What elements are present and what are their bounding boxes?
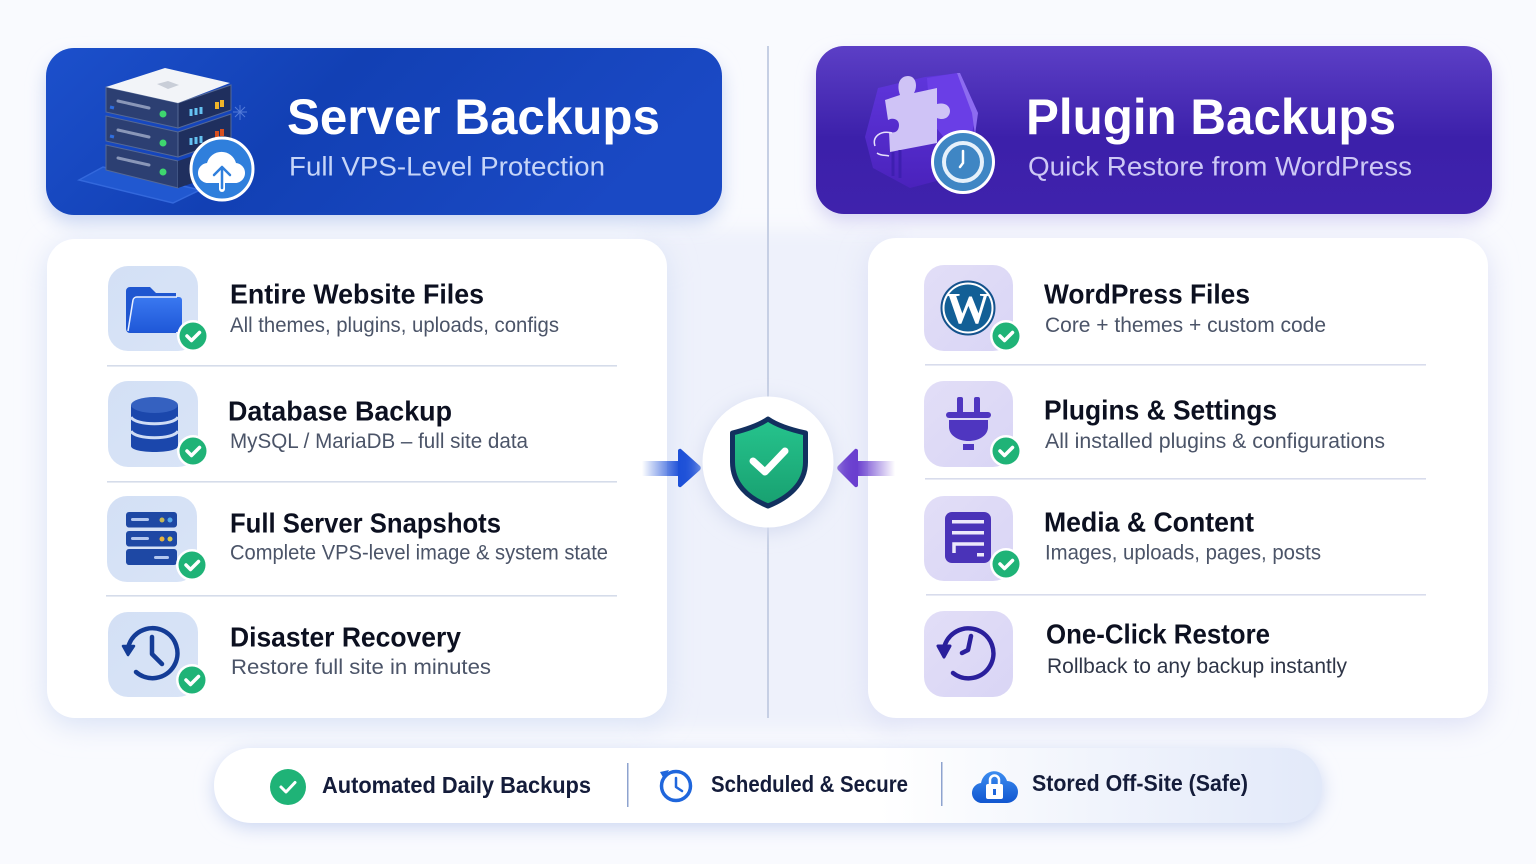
item: media and content: Media & Content — [1044, 506, 1254, 538]
item: one-click restore: One-Click Restore — [1046, 618, 1270, 650]
subheading: Quick Restore from WordPress — [1028, 152, 1412, 182]
header: server backups — [46, 48, 722, 223]
item: entire website files — [108, 266, 559, 352]
item: entire website files: All themes, plugins, uploads, configs — [230, 314, 559, 337]
item: full server snapshots — [107, 496, 608, 582]
icon: history clock — [123, 628, 177, 678]
feature: automated daily backups — [270, 769, 591, 805]
feature: automated daily backups: Automated Daily Backups — [322, 772, 591, 798]
header: plugin backups — [816, 46, 1492, 221]
icon: puzzle piece with clock — [865, 73, 995, 194]
feature: stored off-site: Stored Off-Site (Safe) — [1032, 770, 1248, 796]
subheading: Full VPS-Level Protection — [289, 152, 605, 182]
item: wordpress files — [924, 265, 1326, 352]
item: wordpress files: Core + themes + custom code — [1045, 314, 1326, 337]
icon: database — [131, 397, 178, 452]
icon: folder — [126, 287, 182, 333]
item: plugins and settings: All installed plugins & configurations — [1045, 430, 1385, 453]
panel: plugin backup list — [868, 238, 1488, 725]
feature: scheduled and secure: Scheduled & Secure — [711, 771, 908, 797]
item: disaster recovery: Disaster Recovery — [230, 622, 461, 652]
center shield badge — [702, 396, 834, 532]
item: disaster recovery — [108, 612, 491, 697]
heading: Server Backups — [287, 89, 660, 145]
icon: shield with check — [732, 419, 806, 506]
feature: scheduled and secure — [660, 770, 908, 800]
item: database backup: Database Backup — [228, 396, 452, 426]
icon: restore clock — [938, 628, 993, 678]
item: plugins and settings — [924, 381, 1385, 467]
item: database backup: MySQL / MariaDB – full site data — [230, 430, 528, 453]
arrow: server to shield — [642, 449, 701, 487]
panel: server backup list — [47, 239, 667, 725]
item: disaster recovery: Restore full site in minutes — [231, 656, 491, 679]
center divider line — [767, 46, 769, 718]
icon: wordpress logo: W — [946, 284, 990, 333]
item: one-click restore: Rollback to any backup instantly — [1047, 655, 1347, 678]
item: plugins and settings: Plugins & Settings — [1044, 394, 1277, 426]
arrow: plugin to shield — [837, 449, 895, 487]
item: media and content — [924, 496, 1321, 581]
heading: Plugin Backups — [1026, 89, 1396, 145]
icon: plug — [946, 397, 991, 450]
bottom feature bar — [214, 748, 1322, 828]
item: wordpress files: WordPress Files — [1044, 278, 1250, 310]
item: one-click restore — [924, 611, 1347, 697]
icon: document — [945, 512, 991, 563]
icon: server stack with cloud upload — [79, 68, 253, 203]
item: database backup — [108, 381, 528, 467]
item: full server snapshots: Full Server Snapshots — [230, 508, 501, 538]
item: full server snapshots: Complete VPS-level image & system state — [230, 542, 608, 564]
icon: server rack — [126, 512, 177, 565]
item: entire website files: Entire Website Files — [230, 278, 484, 310]
item: media and content: Images, uploads, pages, posts — [1045, 542, 1321, 564]
feature: stored off-site — [972, 770, 1248, 803]
